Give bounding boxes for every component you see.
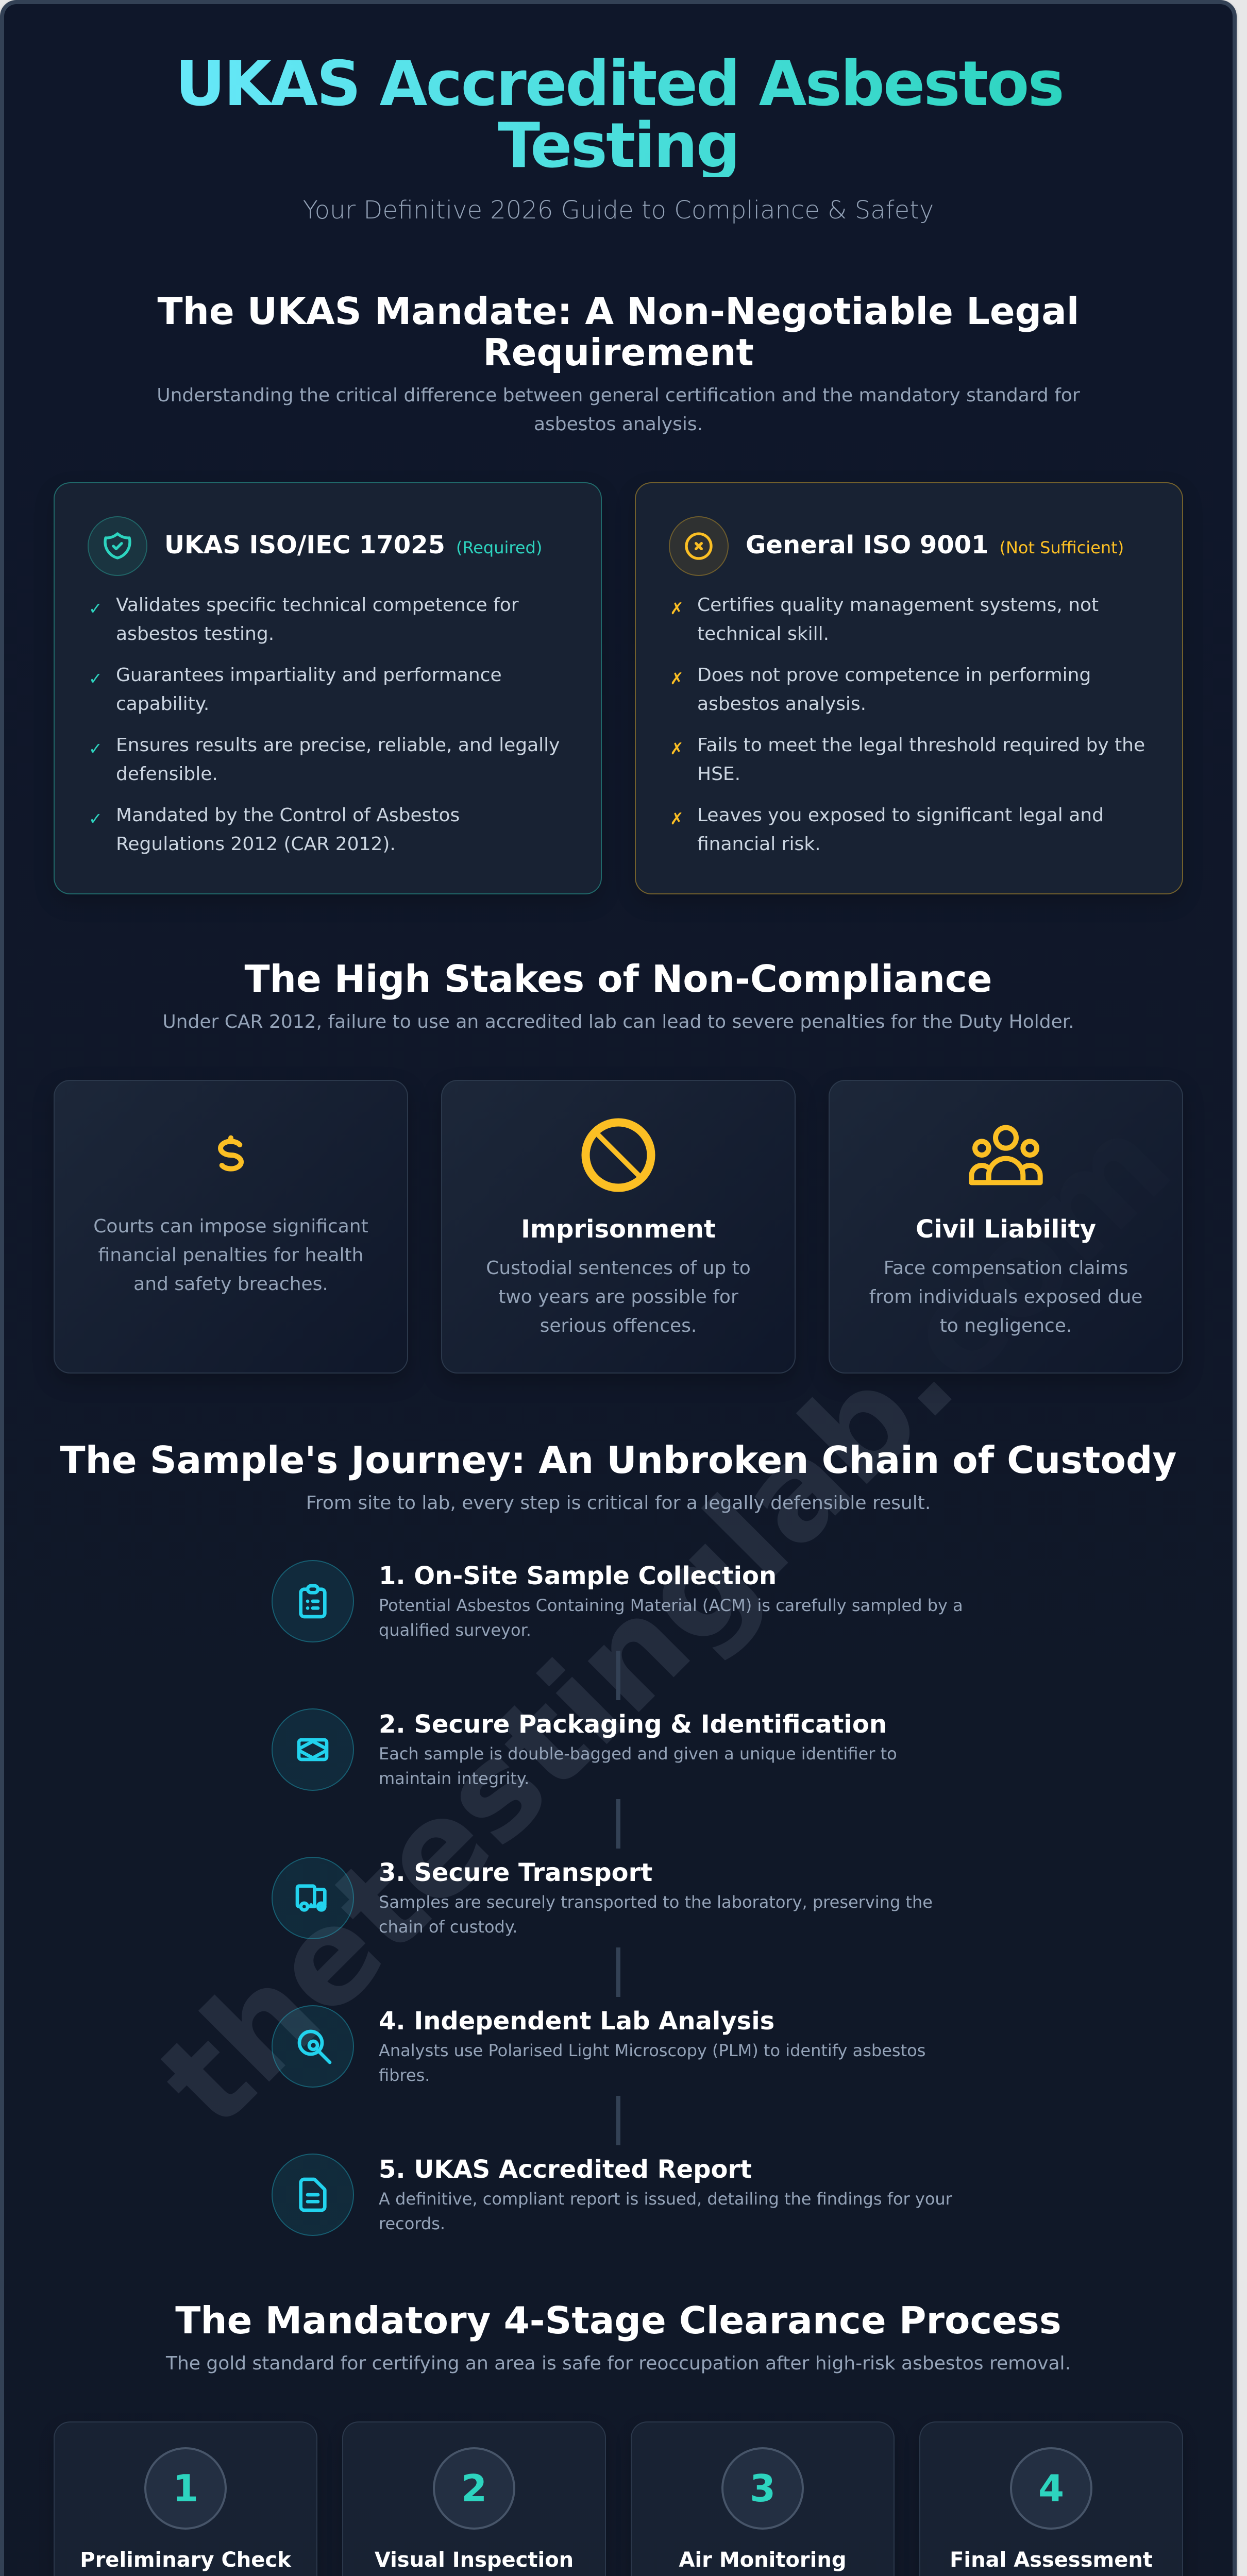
item: financial risk.	[697, 834, 821, 855]
item: HSE.	[697, 764, 740, 785]
step text: Each sample is double-bagged and given a unique identifier to	[379, 1744, 897, 1764]
step text: fibres.	[379, 2065, 430, 2085]
item: ✓	[89, 669, 103, 688]
text: serious offences.	[540, 1315, 697, 1336]
step title: 3. Secure Transport	[379, 1858, 652, 1887]
stage number	[144, 2447, 227, 2530]
step 5	[272, 2154, 941, 2236]
item: ✓	[89, 739, 103, 758]
icon: people	[965, 1114, 1047, 1196]
stage title: Final Assessment	[950, 2548, 1153, 2572]
step title: 1. On-Site Sample Collection	[379, 1562, 777, 1590]
panel: fines	[54, 1080, 408, 1374]
stage number	[1010, 2447, 1092, 2530]
item	[89, 805, 460, 855]
arrow: connector 2	[616, 1799, 620, 1849]
item: ✗	[670, 599, 684, 618]
step text	[379, 1890, 933, 1939]
stage number: 3	[750, 2467, 776, 2510]
title	[175, 54, 1061, 177]
text: clearance intro: The gold standard for certifying an area is safe for reoccupation after high-risk asbestos removal.	[166, 2353, 1071, 2374]
icon: microscope lens	[272, 2005, 354, 2088]
item: Leaves you exposed to significant legal and	[697, 805, 1104, 826]
item: capability.	[116, 693, 209, 715]
step text: chain of custody.	[379, 1917, 517, 1937]
item: Regulations 2012 (CAR 2012).	[116, 834, 396, 855]
panel: General ISO 9001	[635, 482, 1183, 894]
item: defensible.	[116, 764, 218, 785]
item: technical skill.	[697, 623, 829, 645]
text	[829, 1254, 1183, 1341]
step text	[379, 1741, 897, 1791]
heading: Civil Liability	[916, 1215, 1096, 1244]
item: Does not prove competence in performing	[697, 665, 1091, 686]
step text: Samples are securely transported to the laboratory, preserving the	[379, 1892, 933, 1912]
step text	[379, 2038, 925, 2088]
item	[670, 735, 1145, 785]
panel: stage 1	[54, 2421, 317, 2576]
text: journey intro: From site to lab, every step is critical for a legally defensible result.	[306, 1493, 931, 1514]
card heading: General ISO 9001 (Not Sufficient)	[746, 531, 1124, 560]
list: ISO 9001 shortcomings	[670, 595, 1145, 855]
step text: qualified surveyor.	[379, 1620, 531, 1640]
text: mandate intro	[157, 385, 1080, 435]
step text: Potential Asbestos Containing Material (ACM) is carefully sampled by a	[379, 1596, 963, 1615]
heading: clearance process: The Mandatory 4-Stage Clearance Process	[175, 2299, 1061, 2342]
item	[89, 735, 560, 785]
item	[89, 665, 502, 715]
stage number	[433, 2447, 515, 2530]
text: mandate intro: asbestos analysis.	[534, 414, 703, 435]
item: asbestos testing.	[116, 623, 274, 645]
item: Mandated by the Control of Asbestos	[116, 805, 460, 826]
stage number: 4	[1038, 2467, 1064, 2510]
text	[93, 1216, 368, 1295]
heading: UKAS mandate	[158, 290, 1079, 374]
text: two years are possible for	[498, 1286, 738, 1308]
step text: Analysts use Polarised Light Microscopy (PLM) to identify asbestos	[379, 2041, 925, 2060]
text	[441, 1254, 796, 1341]
step title: 4. Independent Lab Analysis	[379, 2007, 774, 2036]
subtitle: Your Definitive 2026 Guide to Compliance & Safety	[303, 196, 934, 225]
title: UKAS Accredited Asbestos	[175, 48, 1063, 120]
step 2	[272, 1708, 941, 1791]
icon: package	[272, 1708, 354, 1791]
item: ✗	[670, 809, 684, 828]
heading: high stakes: The High Stakes of Non-Compliance	[245, 957, 992, 1001]
icon: x circle	[669, 516, 729, 576]
card heading: UKAS ISO/IEC 17025 (Required)	[164, 531, 542, 560]
list: UKAS benefits	[89, 595, 560, 855]
text: Courts can impose significant	[93, 1216, 368, 1237]
item	[670, 665, 1091, 715]
heading: UKAS mandate: The UKAS Mandate: A Non-Negotiable Legal	[158, 290, 1079, 333]
text: to negligence.	[940, 1315, 1072, 1336]
arrow: connector 4	[616, 2096, 620, 2145]
step text: maintain integrity.	[379, 1769, 529, 1788]
step 1	[272, 1560, 941, 1642]
panel: UKAS ISO/IEC 17025	[54, 482, 602, 894]
icon: dollar	[218, 1136, 244, 1172]
step title: 2. Secure Packaging & Identification	[379, 1710, 887, 1739]
panel: stage 4	[919, 2421, 1183, 2576]
heading: Imprisonment	[521, 1215, 716, 1244]
text: financial penalties for health	[98, 1245, 363, 1266]
icon: clipboard	[272, 1560, 354, 1642]
watermark: thetestinglab.com	[130, 1087, 1200, 2156]
icon: truck	[272, 1857, 354, 1939]
heading: sample journey: The Sample's Journey: An Unbroken Chain of Custody	[60, 1438, 1176, 1482]
panel: stage 2	[342, 2421, 606, 2576]
step text	[379, 2187, 952, 2236]
arrow: connector 1	[616, 1651, 620, 1700]
panel: stage 3	[631, 2421, 895, 2576]
item	[670, 805, 1104, 855]
item: ✗	[670, 669, 684, 688]
title: Testing	[498, 110, 739, 182]
icon: document	[272, 2154, 354, 2236]
step title: 5. UKAS Accredited Report	[379, 2155, 752, 2184]
item: ✗	[670, 739, 684, 758]
stage number: 1	[173, 2467, 198, 2510]
text: from individuals exposed due	[869, 1286, 1142, 1308]
text: high stakes intro: Under CAR 2012, failure to use an accredited lab can lead to severe penalties for the Duty Holder.	[162, 1011, 1074, 1032]
stage number: 2	[461, 2467, 487, 2510]
step text	[379, 1593, 963, 1642]
step text: A definitive, compliant report is issued, detailing the findings for your	[379, 2189, 952, 2209]
panel: imprisonment	[441, 1080, 796, 1374]
item: Guarantees impartiality and performance	[116, 665, 502, 686]
item: ✓	[89, 809, 103, 828]
panel: civil liability	[829, 1080, 1183, 1374]
icon: shield check	[88, 516, 147, 576]
step text: records.	[379, 2214, 445, 2233]
item	[89, 595, 519, 645]
item: Certifies quality management systems, not	[697, 595, 1099, 616]
step 3	[272, 1857, 941, 1939]
stage title: Visual Inspection	[375, 2548, 574, 2572]
text: Custodial sentences of up to	[486, 1258, 751, 1279]
item	[670, 595, 1099, 645]
arrow: connector 3	[616, 1947, 620, 1997]
item: Ensures results are precise, reliable, and legally	[116, 735, 560, 756]
text: Face compensation claims	[884, 1258, 1128, 1279]
icon: prohibited	[577, 1114, 660, 1196]
item: asbestos analysis.	[697, 693, 866, 715]
item: Fails to meet the legal threshold required by the	[697, 735, 1145, 756]
stage number	[721, 2447, 804, 2530]
item: Validates specific technical competence for	[116, 595, 519, 616]
stage title: Preliminary Check	[80, 2548, 291, 2572]
text: mandate intro: Understanding the critical difference between general certification and the mandatory standard for	[157, 385, 1080, 406]
heading: UKAS mandate: Requirement	[483, 331, 754, 374]
step 4	[272, 2005, 941, 2088]
text: and safety breaches.	[133, 1274, 328, 1295]
item: ✓	[89, 599, 103, 618]
stage title: Air Monitoring	[679, 2548, 846, 2572]
